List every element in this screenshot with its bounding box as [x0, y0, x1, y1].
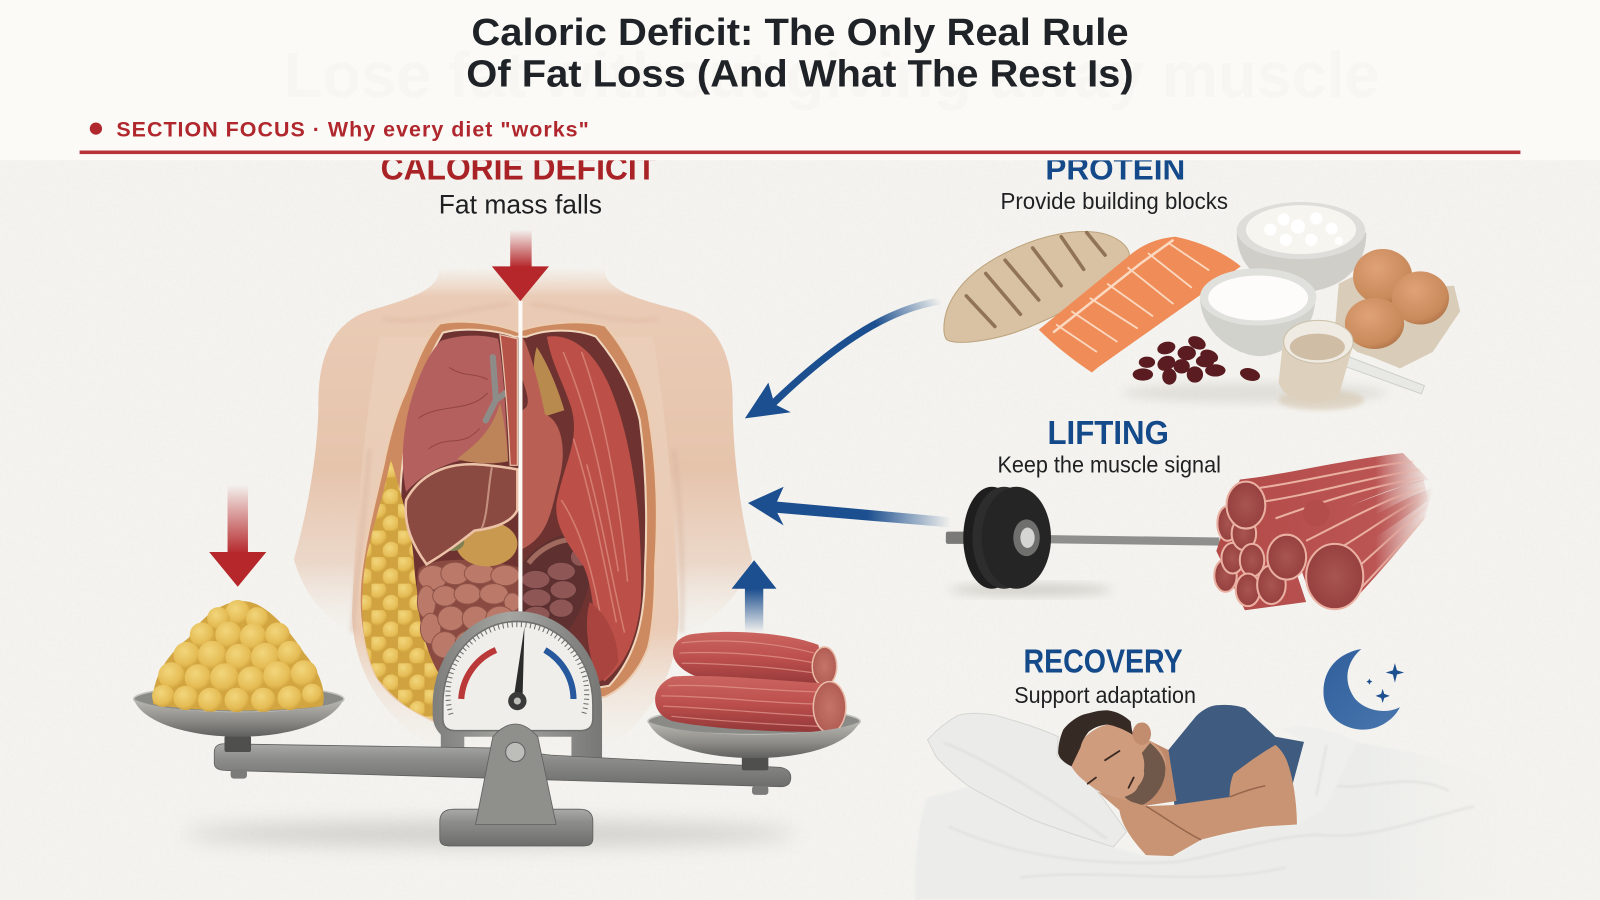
torso centre — [352, 337, 679, 750]
fat pile — [152, 600, 324, 712]
heading: calorie deficit — [382, 160, 656, 214]
neck — [1143, 741, 1177, 806]
pan stems — [224, 736, 768, 770]
eggs — [1345, 249, 1449, 349]
cottage cheese bowl — [1237, 202, 1366, 292]
right pan bowl — [648, 721, 860, 758]
gauge red arc — [461, 650, 496, 699]
recovery heading: RECOVERY — [1023, 643, 1183, 680]
lower muscle — [587, 602, 618, 682]
lifting heading: LIFTING — [1047, 415, 1169, 452]
arrow: fat down — [209, 485, 266, 587]
right intestine — [521, 532, 592, 631]
yogurt bowl — [1200, 268, 1316, 356]
icon: moon and stars — [1323, 649, 1404, 730]
powder scoop — [1279, 320, 1424, 410]
beans — [1133, 333, 1261, 385]
arrow: protein to torso — [745, 301, 941, 418]
header band — [0, 0, 1600, 160]
scale shadow — [184, 821, 796, 846]
egg carton — [1335, 273, 1460, 368]
central left strip — [500, 335, 517, 465]
fibre bundles — [1216, 453, 1429, 610]
airway — [486, 357, 507, 420]
head — [1071, 724, 1166, 805]
ear — [1133, 722, 1151, 745]
protein heading: PROTEIN — [1045, 151, 1185, 187]
arrow: lifting to torso — [748, 487, 951, 528]
title: Caloric Deficit: The Only Real Rule — [471, 11, 1129, 54]
protein foods — [944, 202, 1460, 410]
protein heading: Provide building blocks — [1001, 188, 1228, 214]
liver — [406, 464, 517, 564]
gall bladder — [440, 533, 464, 551]
salmon — [1039, 237, 1241, 372]
recovery heading — [1014, 643, 1196, 708]
muscle bundle — [1214, 453, 1434, 610]
beard — [1124, 743, 1165, 805]
pivot base — [440, 809, 593, 846]
lung veins — [418, 367, 488, 449]
duvet folds — [949, 745, 1474, 878]
sleeping man in bed — [915, 705, 1520, 900]
central right column of loops — [522, 406, 539, 506]
torso and arms — [294, 267, 752, 638]
food shadow — [1122, 383, 1388, 403]
gauge face — [443, 621, 593, 731]
gauge needle — [513, 627, 524, 701]
hair — [1058, 710, 1133, 766]
balance scale — [134, 611, 860, 846]
clavicle lines — [383, 304, 658, 321]
small intestine left — [417, 560, 520, 673]
right pan back — [648, 708, 860, 735]
bottom cylinder — [655, 676, 832, 732]
upper duvet — [1282, 726, 1356, 824]
small round fibre — [1303, 500, 1330, 527]
heading: calorie deficit: Fat mass falls — [439, 189, 602, 219]
pillow seam — [944, 743, 1107, 839]
torso anatomy illustration — [294, 267, 752, 750]
muscle fibres — [561, 352, 628, 653]
subcutaneous fat band — [362, 459, 443, 720]
arrow: muscle up — [732, 560, 777, 633]
bundle cross sections — [1214, 482, 1363, 609]
left pan bowl — [134, 699, 344, 737]
title: Of Fat Loss (And What The Rest Is) — [466, 53, 1134, 96]
section focus label: SECTION FOCUS · Why every diet "works" — [116, 118, 589, 142]
lung — [403, 336, 508, 492]
gauge housing — [433, 611, 602, 765]
recovery heading: Support adaptation — [1014, 682, 1196, 708]
yellow tissue — [534, 347, 564, 416]
heading: calorie deficit: CALORIE DEFICIT — [381, 151, 657, 188]
shirt — [1168, 705, 1304, 806]
lifting heading: Keep the muscle signal — [997, 451, 1221, 477]
left pan back — [134, 686, 344, 712]
barbell — [946, 487, 1219, 596]
title — [466, 11, 1134, 96]
bar — [946, 534, 1219, 546]
arm — [1098, 745, 1297, 856]
yellow-brown organ — [457, 403, 508, 463]
right inner muscle — [522, 337, 563, 549]
arm fold — [1146, 786, 1265, 840]
lifting heading — [997, 415, 1221, 477]
protein heading — [1002, 160, 1228, 214]
beam — [214, 744, 791, 787]
beam feet — [231, 769, 768, 795]
arrow: top red down — [492, 230, 549, 301]
body cutaway — [360, 322, 657, 721]
top cylinder — [673, 632, 827, 686]
central divider — [518, 301, 522, 612]
plates — [963, 487, 1020, 589]
bedding — [915, 742, 1520, 900]
pancreas organ — [456, 521, 517, 566]
gauge blue arc — [545, 650, 573, 699]
arm shadow lines — [352, 449, 682, 633]
closed eyes and mouth — [1088, 751, 1134, 788]
ghost subtitle: Lose fat without giving away muscle — [284, 39, 1380, 111]
chicken breast — [944, 232, 1129, 342]
muscle stack — [655, 632, 846, 733]
pillow — [928, 713, 1127, 847]
right large muscle — [547, 336, 641, 682]
pivot column — [476, 724, 556, 824]
gauge ticks — [448, 625, 587, 714]
cavity — [400, 330, 646, 714]
